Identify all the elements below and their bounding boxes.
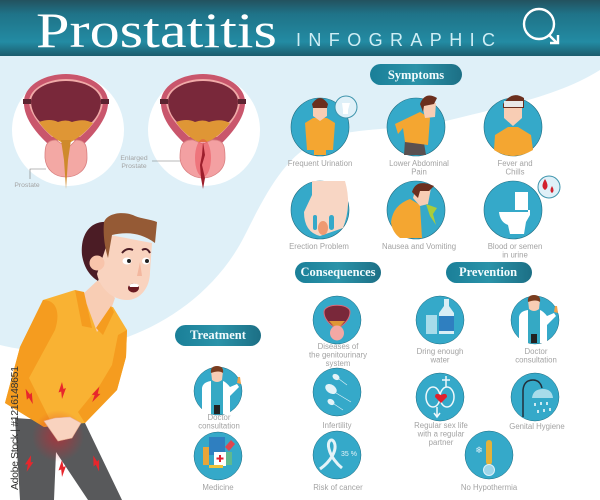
pill: treatment [175,325,261,346]
hair top [104,213,157,258]
figure [305,118,335,155]
label: Nausea and Vomiting [382,242,456,251]
percentage: 35 % [341,451,357,458]
label: Doctor [525,347,548,356]
pill: symptoms: Symptoms [388,68,444,82]
ribbon [320,440,342,469]
symptom: lower abdominal pain [387,96,449,176]
water drops [535,402,550,413]
white circle [148,74,260,186]
label: Doctor [208,413,231,422]
light blue background blob [0,56,600,351]
trousers [15,418,122,500]
speech bubble [335,96,357,118]
prevention: genital hygiene [509,373,565,431]
snowflake: ❄ [475,446,483,456]
consequence: genitourinary disease [309,296,367,368]
mini organ [324,305,350,329]
symptom: fever and chills [484,95,542,176]
label: partner [429,438,454,447]
pill: symptoms [370,64,462,85]
pill: consequences [295,262,381,283]
symptom: nausea and vomiting [382,181,456,251]
figure [404,140,426,155]
speech bubble [538,176,560,198]
inflammation [195,139,211,177]
bottle [439,299,454,334]
enlarged label: Enlarged [120,155,148,162]
face [97,235,152,300]
heart [435,394,447,403]
label: water [429,356,450,364]
pill: prevention: Prevention [459,265,517,279]
label: Diseases of [318,342,359,351]
label: Frequent Urination [288,159,352,168]
prostate label: Prostate [14,182,40,189]
label: Fever and [497,159,533,168]
label: Infertility [322,421,352,430]
label: No Hypothermia [461,483,518,492]
sperm [324,373,351,410]
thermometer [486,440,492,465]
label: Genital Hygiene [509,422,565,431]
treatment: medicine [194,432,242,492]
mouth [128,284,139,292]
enlarged pointer [152,160,180,162]
prostate gland [45,140,87,177]
glass [426,315,437,334]
label: Pain [411,168,427,176]
prevention: doctor [511,295,559,364]
prevention: no hypothermia [461,431,518,492]
label: the genitourinary [309,350,367,360]
vomit [426,204,437,225]
bladder [160,74,246,143]
icon: male symbol magnifier [524,9,558,43]
label: Chills [505,168,525,176]
doctor figure [519,295,558,343]
man character [5,213,157,500]
treatment: doctor [194,366,242,430]
label: consultation [198,422,240,430]
figure [494,127,533,156]
prevention: regular sex life [414,373,468,447]
symptom: erection problem [289,181,349,251]
enlarged gland [180,140,225,178]
shower [523,380,542,417]
toilet [499,192,530,234]
label: with a regular [417,430,465,438]
label: Medicine [202,483,234,492]
panel: normal prostate diagram [12,74,124,189]
medicine items [203,437,235,468]
title: Prostatitis [36,2,277,58]
neck [83,280,115,332]
stock id text: Adobe Stock | #1216148651 [9,366,21,490]
symptom: frequent urination [288,96,357,168]
pill: consequences: Consequences [300,265,376,279]
label: Lower Abdominal [389,159,449,168]
pain bolts [22,382,103,477]
sweater [5,290,127,427]
gender symbols [426,376,454,417]
label: Regular sex life [414,421,468,430]
pill: treatment: Treatment [190,328,247,342]
label: in urine [502,250,528,260]
consequence: risk of cancer [313,431,363,492]
illustration [304,181,348,236]
label: Blood or semen [488,242,542,251]
symptom: blood or semen in urine [484,176,560,260]
collar [75,290,114,335]
label: consultation [515,356,557,364]
prostate pointer [30,169,46,179]
panel: enlarged prostate diagram [120,74,260,189]
nose [137,262,142,276]
eyebrows [122,249,150,253]
hair back [82,222,112,281]
sleeve [5,300,57,427]
prevention: drink water [416,296,464,364]
header background [0,0,600,56]
label: system [326,359,350,368]
white circle [12,74,124,186]
pill: prevention [446,262,532,283]
figure [391,199,422,238]
doctor figure [202,366,241,414]
label: Risk of cancer [313,483,363,492]
label: Dring enough [417,347,463,356]
bladder [23,74,109,143]
subtitle: INFOGRAPHIC [296,30,495,50]
enlarged label: Prostate [121,163,147,170]
ear [90,256,104,270]
label: Erection Problem [289,242,349,251]
pain glow [32,410,84,462]
urethra [61,140,71,189]
eyes [122,258,150,264]
urethra [200,142,205,189]
consequence: infertility [313,368,361,430]
hands [44,417,81,441]
